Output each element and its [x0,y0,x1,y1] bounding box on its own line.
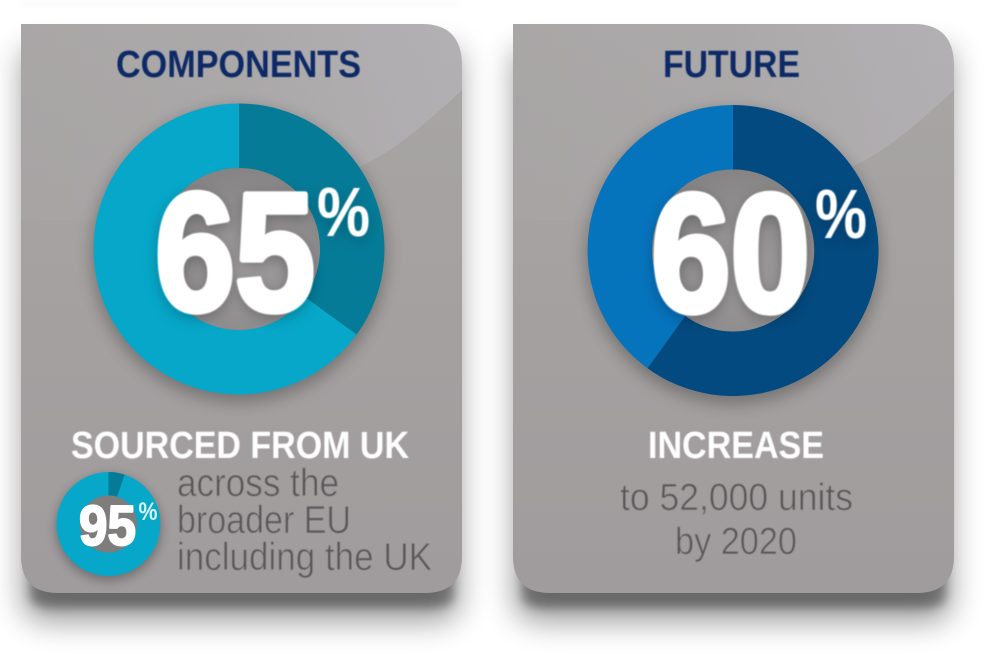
text: to 52,000 units by 2020: to 52,000 units [620,477,853,519]
small donut: 95 percent [56,472,162,581]
text: to 52,000 units by 2020: by 2020 [675,521,797,563]
value: 95 percent: 95 [79,494,136,558]
card body [513,24,954,593]
heading: future: FUTURE [663,44,800,86]
card shadow [22,50,460,622]
label: increase: INCREASE [648,425,824,467]
panel: future [513,24,954,622]
value: 65 percent: 65 [155,158,315,346]
value: 60 percent: 60 [651,159,810,347]
text: across the broader EU including the UK: across the [177,462,339,505]
value: 65 percent: % [317,173,370,251]
label: sourced from UK: SOURCED FROM UK [71,425,409,467]
card body [21,24,462,593]
donut chart: 65 percent [92,104,386,402]
text: across the broader EU including the UK: including the UK [177,536,432,579]
panel: components [21,24,462,622]
text: across the broader EU including the UK: broader EU [177,499,351,542]
text: to 52,000 units by 2020 [620,477,853,563]
card shadow [514,50,952,622]
background shadow band [20,0,460,6]
text: across the broader EU including the UK [177,462,432,579]
value: 60 percent: % [815,175,867,253]
donut chart: 60 percent [586,105,880,404]
card highlight [513,24,954,220]
value: 95 percent: % [138,498,158,526]
card highlight [21,24,462,220]
heading: components: COMPONENTS [116,44,361,86]
